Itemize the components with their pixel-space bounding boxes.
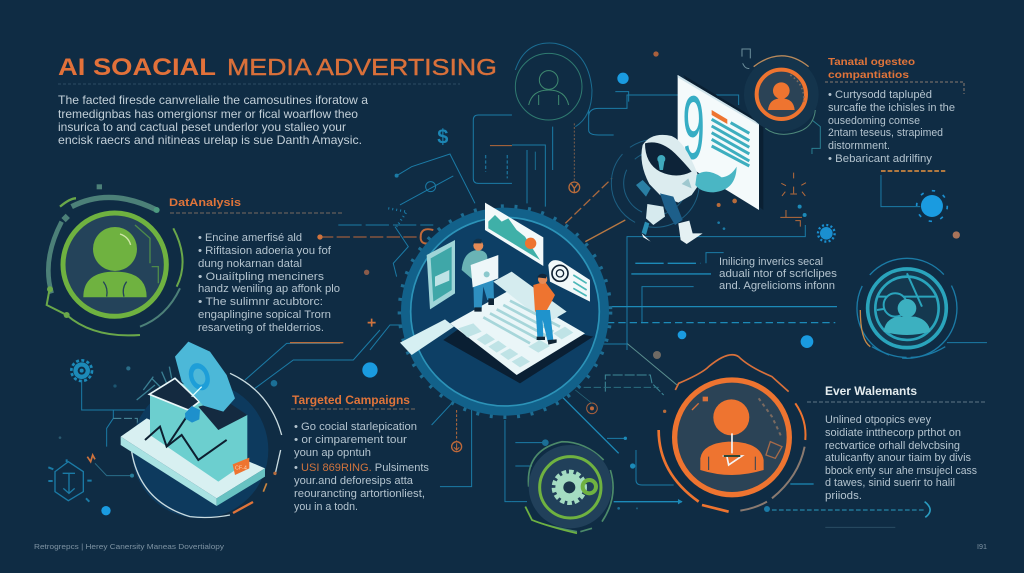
icon: green person (Data Analysis) bbox=[47, 184, 183, 335]
chart card bbox=[485, 203, 543, 266]
icon: blue spiky dot bbox=[818, 225, 835, 242]
circuit lines: lower left bbox=[48, 330, 512, 515]
data analysis bullet text: • Ouaiítpling menciners bbox=[198, 271, 324, 283]
icon: faint person in circle bbox=[515, 43, 592, 127]
middle right text: and. Agrelicioms infonn bbox=[719, 280, 835, 292]
ever walemants text bbox=[825, 414, 977, 502]
central circle illustration bbox=[400, 203, 610, 417]
chat card bbox=[548, 260, 590, 302]
intro text block: The facted firesde canvrelialie the camosutines iforatow a bbox=[58, 94, 369, 107]
box bbox=[149, 378, 247, 482]
ever walemants text: atulicanfty anour tiaim by divis bbox=[825, 452, 971, 464]
middle right text: Inilicing inverics secal bbox=[719, 256, 823, 268]
circuit lines: upper right bbox=[512, 43, 960, 350]
icon: small orange pin bbox=[452, 442, 462, 452]
page number: I91 bbox=[977, 542, 987, 551]
icon: orange person (large) bbox=[659, 355, 806, 512]
icon: small y marker bbox=[569, 182, 580, 193]
targeted campaigns bullet text: • or cimparement tour bbox=[294, 434, 408, 446]
icon: orange light bulb bbox=[780, 173, 806, 227]
targeted campaigns bullet text: • USI 869RING. Pulsiments bbox=[294, 462, 429, 474]
data analysis bullet text bbox=[198, 232, 340, 334]
middle right text bbox=[719, 256, 837, 292]
helmet and body bbox=[636, 135, 737, 244]
targeted campaigns bullet text: your.and deforesips atta bbox=[294, 475, 413, 487]
ever walemants text: bbock enty sur ahe rnsujecl cass bbox=[825, 465, 977, 477]
middle right text: aduali ntor of scrlclipes bbox=[719, 268, 837, 280]
data analysis bullet text: • The sulimnr acubtorc: bbox=[198, 296, 323, 308]
person with laptop bbox=[462, 239, 498, 312]
data analysis bullet text: dung nokarnan datal bbox=[198, 258, 302, 270]
ever walemants text: d tawes, sinid suerir to halil bbox=[825, 477, 955, 489]
ever walemants text: rectvartice orhall delvcbsing bbox=[825, 440, 960, 452]
icon: teal person in wheel bbox=[857, 258, 957, 358]
heading: top right: compantiatios bbox=[828, 69, 909, 81]
white panel bbox=[678, 75, 763, 210]
heading: data analysis: DatAnalysis bbox=[169, 197, 241, 209]
footer text: Retrogrepcs | Herey Canersity Maneas Dovertialopy bbox=[34, 542, 224, 551]
circuit lines: upper left bbox=[290, 115, 512, 350]
icon: blue sun bbox=[917, 191, 947, 221]
data analysis bullet text: resarveting of thelderrios. bbox=[198, 322, 324, 334]
platform bbox=[121, 418, 265, 506]
icon: teal wheel lower arc bbox=[872, 343, 987, 357]
icon: small blue gear bbox=[71, 360, 92, 381]
heading: ever walemants: Ever Walemants bbox=[825, 386, 917, 398]
top right bullet text: surcafie the ichisles in the bbox=[828, 102, 955, 114]
top right bullet text: • Curtysodd taplupèd bbox=[828, 89, 932, 101]
robot figure and panel bbox=[636, 75, 763, 244]
icon: isometric box with dish: CF-4 bbox=[235, 465, 247, 471]
intro text block: tremedignbas has omergionsr mer or fical woarflow theo bbox=[58, 108, 358, 121]
icon: green gear bbox=[525, 442, 613, 533]
title: AI SOACIAL bbox=[58, 54, 216, 81]
top right bullet text: 2ntam teseus, strapimed bbox=[828, 127, 943, 139]
data analysis bullet text: handz weniling ap affonk plo bbox=[198, 283, 340, 295]
icon: hexagon arrow bbox=[48, 459, 92, 502]
data analysis bullet text: engaplingine sopical Trorn bbox=[198, 309, 331, 321]
document platform bbox=[400, 272, 593, 383]
intro text block: encisk raecrs and nitineas urelap is sue Danth Amaysic. bbox=[58, 134, 362, 147]
ever walemants text: priiods. bbox=[825, 490, 862, 502]
targeted campaigns bullet text: reourancting artortionliest, bbox=[294, 488, 425, 500]
dish bbox=[175, 342, 235, 412]
data analysis bullet text: • Rifitasion adoeria you fof bbox=[198, 245, 331, 257]
person standing bbox=[533, 274, 557, 345]
targeted campaigns bullet text: youn ap opntuh bbox=[294, 447, 371, 459]
circuit lines: lower right bbox=[512, 330, 930, 527]
intro text block: insurica to and cactual peset underlor you stalieo your bbox=[58, 121, 346, 134]
intro text block bbox=[58, 94, 369, 147]
top right bullet text: ousedoming comse bbox=[828, 115, 920, 127]
heading: targeted campaigns: Targeted Campaigns bbox=[292, 395, 410, 407]
top right bullet text: • Bebaricant adrilfiny bbox=[828, 153, 933, 165]
heading: top right: Tanatal ogesteo bbox=[828, 56, 915, 68]
title: MEDIA ADVERTISING bbox=[227, 54, 497, 80]
top right bullet text: distormment. bbox=[828, 140, 890, 152]
phone card bbox=[427, 240, 455, 309]
targeted campaigns bullet text: • Go cocial starlepication bbox=[294, 421, 417, 433]
icon: isometric box with dish bbox=[121, 342, 282, 518]
title bbox=[58, 54, 497, 81]
ever walemants text: Unlined otpopics evey bbox=[825, 414, 932, 426]
data analysis bullet text: • Encine amerfisé ald bbox=[198, 232, 302, 244]
targeted campaigns bullet text bbox=[294, 421, 429, 513]
heading: top right bbox=[828, 56, 915, 81]
ever walemants text: soidiate intthecorp prthot on bbox=[825, 427, 961, 439]
icon: orange person (top right) bbox=[744, 56, 819, 134]
top right bullet text bbox=[828, 89, 955, 165]
icon: dollar glyph: $ bbox=[437, 126, 448, 148]
targeted campaigns bullet text: you in a todn. bbox=[294, 501, 358, 513]
robot figure and panel: 9 bbox=[683, 78, 705, 178]
